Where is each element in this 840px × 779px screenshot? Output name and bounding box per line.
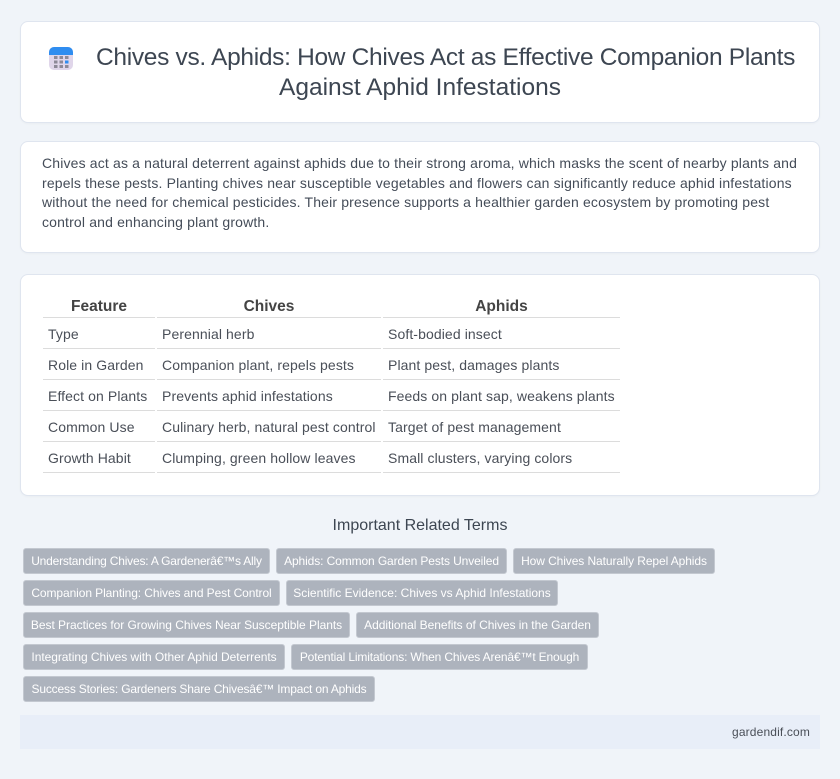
related term tags: Companion Planting: Chives and Pest Control xyxy=(31,586,272,600)
intro paragraph: Chives act as a natural deterrent against aphids due to their strong aroma, which masks the scent of nearby plants and xyxy=(42,155,797,171)
footer bar xyxy=(20,715,820,749)
table card xyxy=(20,274,820,496)
comparison table: Type xyxy=(48,326,79,342)
intro paragraph: repels these pests. Planting chives near susceptible vegetables and flowers can significantly reduce aphid infestations xyxy=(42,175,792,191)
title xyxy=(96,44,795,101)
icon: calendar xyxy=(49,47,73,70)
comparison table: Aphids xyxy=(475,298,528,315)
comparison table: Feature xyxy=(71,298,127,315)
title: Chives vs. Aphids: How Chives Act as Effective Companion Plants xyxy=(96,44,795,71)
intro card xyxy=(20,141,820,253)
related term tags: Scientific Evidence: Chives vs Aphid Infestations xyxy=(293,586,551,600)
intro paragraph xyxy=(42,155,797,230)
intro paragraph: control and enhancing plant growth. xyxy=(42,214,269,230)
related term tags: Success Stories: Gardeners Share Chivesâ€™ Impact on Aphids xyxy=(32,682,366,696)
comparison table: Feeds on plant sap, weakens plants xyxy=(388,388,615,404)
intro paragraph: without the need for chemical pesticides. Their presence supports a healthier garden ecosystem by promoting pest xyxy=(42,194,769,210)
related term tags: Understanding Chives: A Gardenerâ€™s Ally xyxy=(31,554,262,568)
comparison table: Prevents aphid infestations xyxy=(162,388,333,404)
comparison table: Perennial herb xyxy=(162,326,254,342)
comparison table: Role in Garden xyxy=(48,357,144,373)
header card xyxy=(20,21,820,123)
related term tags: Potential Limitations: When Chives Arenâ€™t Enough xyxy=(300,650,579,664)
comparison table: Chives xyxy=(244,298,294,315)
title: Against Aphid Infestations xyxy=(279,74,561,101)
comparison table: Target of pest management xyxy=(388,419,561,435)
comparison table: Small clusters, varying colors xyxy=(388,450,572,466)
related term tags: Additional Benefits of Chives in the Garden xyxy=(364,618,591,632)
footer source: gardendif.com xyxy=(732,725,810,739)
related term tags: Integrating Chives with Other Aphid Deterrents xyxy=(31,650,277,664)
related term tags: Best Practices for Growing Chives Near Susceptible Plants xyxy=(31,618,342,632)
related terms heading: Important Related Terms xyxy=(333,517,507,534)
related term tags: Aphids: Common Garden Pests Unveiled xyxy=(284,554,499,568)
comparison table: Effect on Plants xyxy=(48,388,147,404)
comparison table: Growth Habit xyxy=(48,450,131,466)
comparison table: Common Use xyxy=(48,419,135,435)
comparison table: Clumping, green hollow leaves xyxy=(162,450,356,466)
comparison table: Plant pest, damages plants xyxy=(388,357,559,373)
comparison table: Culinary herb, natural pest control xyxy=(162,419,376,435)
related term tags xyxy=(23,548,715,702)
comparison table: Companion plant, repels pests xyxy=(162,357,354,373)
comparison table: Soft-bodied insect xyxy=(388,326,502,342)
related term tags: How Chives Naturally Repel Aphids xyxy=(521,554,707,568)
comparison table xyxy=(43,298,620,473)
